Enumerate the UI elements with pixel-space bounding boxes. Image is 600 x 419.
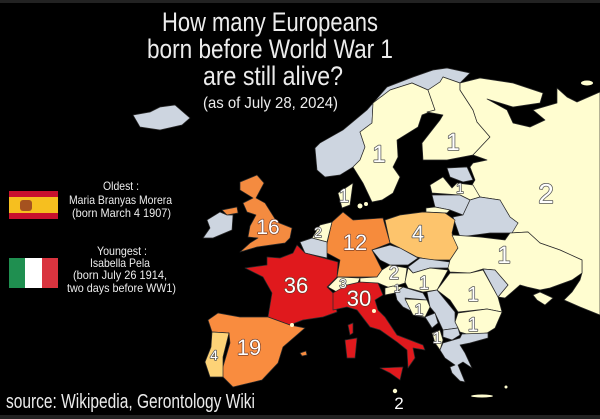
count: Romania: 1 — [467, 284, 479, 306]
caption: youngest person: two days before WW1) — [67, 281, 176, 295]
count: Netherlands: 2 — [314, 224, 322, 240]
count: Italy: 30 — [347, 286, 371, 311]
country: Norway — [315, 68, 470, 177]
country: Albania — [432, 330, 443, 350]
country: Bosnia — [405, 299, 430, 317]
caption: oldest person — [69, 179, 172, 220]
country: Poland — [385, 212, 458, 260]
count: Germany: 12 — [343, 230, 367, 255]
country: Finland — [422, 77, 490, 160]
country: Slovakia — [408, 258, 450, 273]
country: Serbia — [427, 290, 458, 330]
country: Latvia — [430, 177, 480, 200]
country: Hungary — [405, 268, 448, 292]
count: Denmark: 1 — [339, 186, 349, 206]
count: Bulgaria: 1 — [468, 315, 478, 336]
caption: youngest person: Youngest : — [97, 244, 147, 258]
count: Switzerland: 3 — [339, 276, 347, 291]
count: France: 36 — [284, 273, 308, 298]
country: Ireland — [203, 212, 233, 238]
count: Austria: 2 — [389, 263, 399, 283]
count: Latvia: 1 — [456, 180, 464, 196]
caption: youngest person: (born July 26 1914, — [73, 268, 167, 282]
country: Croatia — [395, 287, 427, 318]
country: Bulgaria — [455, 309, 502, 335]
map of Europe — [133, 68, 600, 398]
country: United Kingdom — [222, 175, 292, 252]
title: are still alive? — [203, 61, 343, 91]
country: Montenegro — [425, 313, 438, 328]
title: (as of July 28, 2024) — [203, 95, 338, 112]
country: Iceland — [133, 105, 190, 130]
title: How many Europeans — [162, 7, 378, 37]
count: Portugal: 4 — [210, 347, 218, 363]
count: Russia: 2 — [538, 178, 554, 209]
country: Russia — [460, 78, 600, 315]
count: Finland: 1 — [446, 129, 460, 156]
count: Bosnia: 1 — [415, 302, 424, 319]
country: Ukraine — [448, 232, 582, 298]
country: France — [245, 245, 338, 325]
country: Estonia — [447, 167, 473, 182]
country: North Macedonia — [443, 328, 460, 340]
country: Spain — [208, 313, 307, 387]
country: Denmark — [338, 183, 353, 208]
country: Netherlands — [312, 222, 332, 242]
count: United Kingdom: 16 — [256, 216, 280, 239]
country: Czechia — [372, 245, 418, 265]
count: Slovenia: 1 — [394, 283, 400, 295]
country: Romania — [437, 270, 502, 312]
count: Hungary: 1 — [419, 273, 429, 293]
count: Sweden: 1 — [372, 141, 386, 168]
count: Malta: 2 — [394, 394, 404, 413]
flag: Italy — [9, 258, 58, 288]
count: Poland: 4 — [412, 221, 424, 246]
caption: oldest person: (born March 4 1907) — [72, 206, 171, 220]
country: Switzerland — [328, 277, 360, 292]
title — [147, 7, 393, 112]
caption: youngest person: Isabella Pela — [90, 256, 150, 270]
country: Kaliningrad — [426, 207, 450, 213]
country: Italy — [333, 282, 425, 380]
country: Belarus — [453, 197, 518, 237]
country: Moldova — [483, 269, 508, 297]
caption: oldest person: Oldest : — [103, 179, 139, 193]
flag: Spain — [9, 191, 58, 219]
country: Portugal — [205, 332, 229, 377]
country: Sweden — [353, 83, 435, 202]
country: Lithuania — [432, 195, 470, 215]
title: born before World War 1 — [147, 34, 393, 64]
country: Germany — [325, 212, 390, 277]
count: Spain: 19 — [237, 335, 261, 360]
caption: youngest person — [67, 244, 176, 295]
country: Belgium — [300, 238, 327, 258]
small islands and microstates — [290, 80, 593, 398]
count: Albania: 1 — [433, 330, 442, 347]
caption: oldest person: Maria Branyas Morera — [69, 193, 172, 207]
country counts — [210, 129, 554, 413]
source line: source: Wikipedia, Gerontology Wiki — [6, 391, 255, 413]
country: Greece — [440, 333, 488, 382]
country: Austria — [360, 265, 407, 288]
country: Slovenia — [385, 286, 403, 295]
country: Crimea — [533, 292, 553, 305]
count: Ukraine: 1 — [497, 242, 511, 269]
